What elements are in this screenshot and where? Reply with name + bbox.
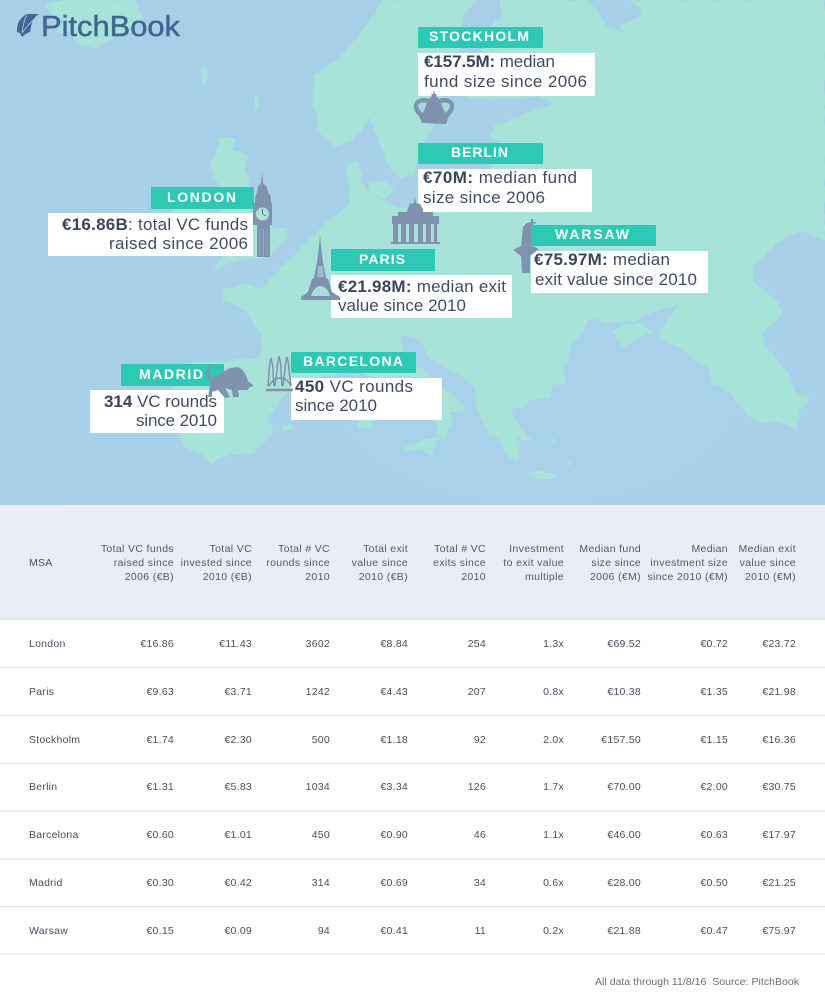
row: Paris: Paris <box>29 686 54 698</box>
table header: exits since <box>433 557 486 569</box>
row: Stockholm: €2.30 <box>224 734 252 746</box>
row: Stockholm: 92 <box>474 734 486 746</box>
row: London: €23.72 <box>762 638 796 650</box>
panel: Warsaw: €75.97M: median <box>534 250 670 269</box>
table header: 2010 (€B) <box>203 571 252 583</box>
table header: Investment <box>509 543 564 555</box>
row: Stockholm: €1.74 <box>146 734 174 746</box>
table header: value since <box>352 557 408 569</box>
panel: Barcelona: since 2010 <box>295 396 377 415</box>
table header: value since <box>740 557 796 569</box>
panel: London: raised since 2006 <box>109 234 248 253</box>
row: Warsaw: €0.41 <box>380 925 408 937</box>
panel: Stockholm: €157.5M: median <box>424 52 555 71</box>
panel: Berlin: size since 2006 <box>423 188 545 207</box>
panel: Paris: PARIS <box>359 251 405 267</box>
row: Madrid: €0.69 <box>380 877 408 889</box>
row: London: €16.86 <box>140 638 174 650</box>
panel: Berlin: €70M: median fund <box>423 168 577 187</box>
row: Paris: €4.43 <box>380 686 408 698</box>
table header: size since <box>591 557 641 569</box>
table header: investment size <box>650 557 728 569</box>
table header: since 2010 (€M) <box>647 571 728 583</box>
icon: Big Ben <box>253 173 272 257</box>
panel: Warsaw <box>531 225 708 293</box>
row: Paris: €9.63 <box>146 686 174 698</box>
table header: 2006 (€B) <box>125 571 174 583</box>
row: Warsaw: 11 <box>475 925 486 937</box>
row: Barcelona: €0.90 <box>380 829 408 841</box>
row: Barcelona: €0.63 <box>700 829 728 841</box>
row: Paris: €1.35 <box>700 686 728 698</box>
row: Madrid: €21.25 <box>762 877 796 889</box>
row: Paris <box>29 686 796 698</box>
panel: Stockholm: fund size since 2006 <box>424 72 587 91</box>
panel: Warsaw: exit value since 2010 <box>535 270 697 289</box>
panel: Paris <box>331 249 512 318</box>
panel: London: LONDON <box>167 189 236 205</box>
table header: to exit value <box>503 557 564 569</box>
row: Berlin: Berlin <box>29 781 57 793</box>
table header: invested since <box>181 557 252 569</box>
table header: multiple <box>525 571 564 583</box>
row: Paris: 207 <box>468 686 486 698</box>
panel: Berlin <box>418 143 592 212</box>
row: Madrid: €28.00 <box>607 877 641 889</box>
row: Paris: €21.98 <box>762 686 796 698</box>
panel: London: €16.86B: total VC funds <box>62 215 248 234</box>
panel: Barcelona: BARCELONA <box>303 353 403 369</box>
row: Berlin <box>29 781 796 793</box>
table header: 2010 (€M) <box>745 571 796 583</box>
icon: Brandenburg Gate <box>391 197 440 244</box>
row: Madrid: 34 <box>474 877 486 889</box>
icon: Eiffel Tower <box>301 235 340 300</box>
panel: Stockholm: STOCKHOLM <box>429 28 529 44</box>
table header: Total # VC <box>434 543 486 555</box>
table header: Median exit <box>738 543 796 555</box>
row: London: €0.72 <box>700 638 728 650</box>
row: London: 1.3x <box>543 638 564 650</box>
row: London: €69.52 <box>607 638 641 650</box>
row: Barcelona <box>29 829 796 841</box>
row: London: 3602 <box>306 638 330 650</box>
row: Warsaw: €0.15 <box>146 925 174 937</box>
row: London: 254 <box>468 638 486 650</box>
row: Madrid: 0.6x <box>543 877 564 889</box>
row: Barcelona: €17.97 <box>762 829 796 841</box>
row: Paris: 0.8x <box>543 686 564 698</box>
table header: MSA <box>29 557 53 569</box>
row: Warsaw: €75.97 <box>762 925 796 937</box>
icon: Sigismund's Column <box>513 219 539 273</box>
row: Paris: €3.71 <box>224 686 252 698</box>
table header: 2010 <box>305 571 330 583</box>
land masses <box>45 0 825 479</box>
row: Stockholm: €157.50 <box>601 734 641 746</box>
White Sea <box>586 0 642 32</box>
table header: Total VC funds <box>101 543 174 555</box>
row: Warsaw <box>29 925 796 937</box>
row: Madrid <box>29 877 796 889</box>
table header: 2010 <box>461 571 486 583</box>
table header: 2006 (€M) <box>590 571 641 583</box>
row: Warsaw: €21.88 <box>607 925 641 937</box>
row: Stockholm: €16.36 <box>762 734 796 746</box>
panel: Paris: €21.98M: median exit <box>338 277 506 296</box>
row: Madrid: Madrid <box>29 877 63 889</box>
row: Barcelona: 46 <box>474 829 486 841</box>
panel: Madrid: since 2010 <box>136 411 217 430</box>
table header: rounds since <box>266 557 330 569</box>
row: Stockholm: €1.15 <box>700 734 728 746</box>
row: Barcelona: €1.01 <box>224 829 252 841</box>
row: Berlin: 1034 <box>306 781 330 793</box>
row: Madrid: €0.42 <box>224 877 252 889</box>
table header: raised since <box>114 557 174 569</box>
panel: Madrid: MADRID <box>139 366 203 382</box>
panel: data table <box>0 505 825 954</box>
table header: 2010 (€B) <box>359 571 408 583</box>
row: Stockholm: Stockholm <box>29 734 80 746</box>
row: London: €11.43 <box>219 638 252 650</box>
panel: Barcelona <box>291 352 442 420</box>
row: Paris: 1242 <box>306 686 330 698</box>
row: London: €8.84 <box>380 638 408 650</box>
row: Berlin: €1.31 <box>146 781 174 793</box>
row: Stockholm: 2.0x <box>543 734 564 746</box>
row: Madrid: €0.50 <box>700 877 728 889</box>
table header: Total VC <box>210 543 252 555</box>
row: Barcelona: 450 <box>312 829 330 841</box>
row: Berlin: 1.7x <box>543 781 564 793</box>
row: Barcelona: €0.60 <box>146 829 174 841</box>
row: Warsaw: 0.2x <box>543 925 564 937</box>
table header <box>0 505 825 619</box>
panel: Warsaw: WARSAW <box>555 226 630 242</box>
icon: crown <box>414 90 454 124</box>
panel: Barcelona: 450 VC rounds <box>295 377 413 396</box>
row: Berlin: €30.75 <box>762 781 796 793</box>
row: Berlin: €3.34 <box>380 781 408 793</box>
panel: map of Europe <box>0 0 825 505</box>
row: Stockholm: €1.18 <box>380 734 408 746</box>
table header: Total exit <box>363 543 408 555</box>
row: Barcelona: 1.1x <box>543 829 564 841</box>
row: Madrid: €0.30 <box>146 877 174 889</box>
panel: Berlin: BERLIN <box>451 144 508 160</box>
panel: London <box>48 187 254 256</box>
row: Paris: €10.38 <box>607 686 641 698</box>
table header: Median fund <box>579 543 641 555</box>
row: Madrid: 314 <box>312 877 330 889</box>
row: London: London <box>29 638 66 650</box>
row: Stockholm: 500 <box>312 734 330 746</box>
row: Berlin: €5.83 <box>224 781 252 793</box>
row: Stockholm <box>29 734 796 746</box>
row: Warsaw: Warsaw <box>29 925 68 937</box>
row: Barcelona: €46.00 <box>607 829 641 841</box>
row: Berlin: 126 <box>468 781 486 793</box>
row: Warsaw: 94 <box>318 925 330 937</box>
row: Warsaw: €0.09 <box>224 925 252 937</box>
logo: PitchBook: PitchBook <box>41 11 181 43</box>
panel: Madrid <box>90 364 224 433</box>
row: Barcelona: Barcelona <box>29 829 79 841</box>
icon: bull <box>206 364 254 398</box>
row: Berlin: €2.00 <box>700 781 728 793</box>
panel: Stockholm <box>418 27 595 96</box>
footer: source note: All data through 11/8/16 Source: PitchBook <box>595 976 800 988</box>
table header: Median <box>691 543 728 555</box>
row: Berlin: €70.00 <box>607 781 641 793</box>
table header: Total # VC <box>278 543 330 555</box>
panel: Madrid: 314 VC rounds <box>104 392 217 411</box>
icon: Sagrada Familia <box>266 356 293 390</box>
row: London <box>29 638 796 650</box>
row: Warsaw: €0.47 <box>700 925 728 937</box>
panel: Paris: value since 2010 <box>338 296 466 315</box>
